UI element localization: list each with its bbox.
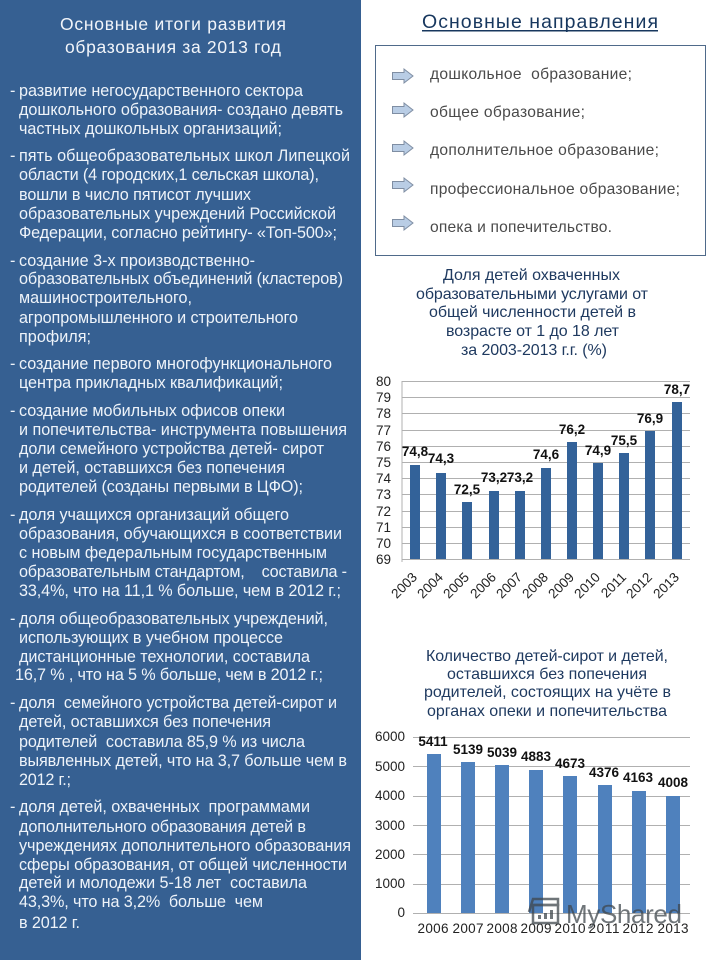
x axis labels: 2011	[588, 921, 620, 936]
x axis labels: 2008	[486, 921, 518, 936]
list item: mobile offices	[10, 402, 347, 496]
list item: federal standard: образования, обучающихся в соответствии	[19, 525, 342, 543]
x axis labels: 2010	[554, 921, 586, 936]
x axis labels	[388, 569, 682, 601]
list item: additional education: сферы образования, от общей численности	[19, 856, 347, 874]
heading: chart 2 title: родителей, состоящих на учёте в	[424, 684, 671, 701]
list item: clusters: образовательных объединений (кластеров)	[19, 270, 343, 288]
data labels: 5139	[453, 742, 483, 757]
list item: additional education: детей и молодежи 5-18 лет составила	[19, 874, 307, 892]
data labels: 78,7	[664, 382, 690, 397]
data labels: 4376	[589, 765, 620, 780]
panel: directions box	[376, 46, 706, 256]
list item: top-500 schools: пять общеобразовательных школ Липецкой	[19, 147, 350, 165]
icon: arrow 4	[392, 178, 413, 192]
list item: federal standard: -	[10, 506, 15, 524]
list item: clusters: агропромышленного и строительного	[19, 309, 298, 327]
list item: top-500 schools: области (4 городских,1 сельская школа),	[19, 166, 319, 184]
list item: mobile offices: и детей, оставшихся без попечения	[19, 459, 285, 477]
x axis labels: 2009	[545, 570, 577, 601]
y axis labels	[376, 374, 391, 567]
list item: top-500 schools: вошли в число пятисот лучших	[19, 186, 251, 204]
list item: family placement: детей, оставшихся без попечения	[19, 713, 271, 731]
list item: clusters: профиля;	[19, 328, 91, 346]
list item: family placement: 2012 г.;	[19, 771, 71, 789]
heading: chart 1 title: за 2003-2013 г.г. (%)	[461, 342, 607, 359]
heading: results of 2013: Основные итоги развития	[60, 14, 286, 34]
list item: mobile offices: и попечительства- инструмента повышения	[19, 421, 347, 439]
list item: distance technologies: 16,7 % , что на 5 % больше, чем в 2012 г.;	[15, 666, 323, 684]
x axis labels: 2007	[452, 921, 484, 936]
heading: chart 2 title	[424, 648, 671, 720]
list item: mobile offices: родителей (созданы первыми в ЦФО);	[19, 478, 303, 496]
y axis labels: 3000	[375, 818, 405, 833]
heading: results of 2013	[60, 14, 286, 57]
data labels: 4883	[521, 749, 552, 764]
text block: directions list: дошкольное образование;	[430, 66, 632, 83]
list item: additional education: 43,3%, что на 3,2% больше чем	[19, 893, 263, 911]
x axis labels: 2009	[520, 921, 552, 936]
list item: family placement: родителей составила 85,9 % из числа	[19, 733, 305, 751]
chart bars	[427, 754, 680, 913]
text block: directions list: общее образование;	[430, 104, 585, 121]
list item: federal standard	[10, 506, 347, 600]
list item: top-500 schools: -	[10, 147, 15, 165]
list item: additional education: учреждениях дополнительного образования	[19, 837, 351, 855]
data labels: 74,6	[533, 447, 560, 462]
y axis labels: 0	[397, 905, 405, 920]
heading: chart 1 title	[416, 267, 649, 359]
list item: private preschool	[10, 82, 343, 138]
x axis labels: 2006	[467, 570, 499, 601]
list item: clusters: машиностроительного,	[19, 289, 192, 307]
list item: additional education: в 2012 г.	[19, 914, 80, 932]
list item: private preschool: частных дошкольных организаций;	[19, 120, 282, 138]
list item: private preschool: -	[10, 82, 15, 100]
x axis labels: 2003	[388, 570, 420, 601]
data labels	[418, 734, 689, 790]
list item: qualification centre: -	[10, 355, 15, 373]
list item: federal standard: образовательным стандартом, составила -	[19, 563, 347, 581]
list item: distance technologies: -	[10, 610, 15, 628]
x axis labels: 2012	[622, 921, 654, 936]
y axis labels: 2000	[375, 847, 405, 862]
list item: qualification centre	[10, 355, 332, 392]
icon: arrow 5	[392, 216, 413, 230]
text block: directions list	[430, 66, 680, 236]
y axis labels: 80	[376, 374, 391, 389]
y axis labels: 1000	[375, 876, 405, 891]
list item: family placement: -	[10, 694, 15, 712]
list item: mobile offices: -	[10, 402, 15, 420]
x axis labels: 2008	[519, 570, 551, 601]
data labels: 76,2	[559, 422, 585, 437]
data labels: 4163	[623, 770, 654, 785]
y axis labels	[375, 729, 405, 920]
list item: top-500 schools: образовательных учреждений Российской	[19, 205, 336, 223]
list item: top-500 schools: Федерации, согласно рейтингу- «Топ-500»;	[19, 224, 337, 242]
list item: family placement	[10, 694, 347, 789]
heading: chart 2 title: оставшихся без попечения	[447, 666, 647, 683]
x axis labels	[418, 921, 688, 936]
x axis labels: 2005	[440, 570, 472, 601]
y axis labels: 70	[376, 536, 391, 551]
heading: chart 1 title: образовательными услугами от	[416, 286, 649, 303]
list item: family placement: доля семейного устройства детей-сирот и	[19, 694, 337, 712]
heading: chart 2 title: Количество детей-сирот и детей,	[426, 648, 668, 665]
icon: arrow 2	[392, 103, 413, 117]
text block: directions list: профессиональное образование;	[430, 181, 680, 198]
list item: federal standard: доля учащихся организаций общего	[19, 506, 289, 524]
list item: distance technologies	[10, 610, 328, 684]
data labels: 72,5	[454, 482, 481, 497]
data labels: 5039	[487, 745, 517, 760]
y axis labels: 74	[376, 471, 391, 486]
x axis labels: 2006	[418, 921, 448, 936]
x axis labels: 2012	[623, 570, 655, 601]
icon: watermark logo	[529, 899, 558, 923]
list item: additional education: дополнительного образования детей в	[19, 818, 306, 836]
y axis labels: 69	[376, 552, 391, 567]
bar chart: orphans count	[375, 729, 690, 936]
data labels	[402, 382, 690, 497]
y axis labels: 4000	[375, 788, 405, 803]
data labels: 74,3	[428, 451, 455, 466]
heading: chart 1 title: общей численности детей в	[429, 304, 636, 321]
icon: arrow 1	[392, 69, 413, 83]
list item: mobile offices: доли семейного устройства детей- сирот	[19, 440, 325, 458]
heading: chart 1 title: возрасте от 1 до 18 лет	[446, 323, 620, 340]
x axis labels: 2010	[571, 570, 603, 601]
chart bars	[410, 402, 682, 559]
y axis labels: 75	[376, 455, 391, 470]
list item: distance technologies: доля общеобразовательных учреждений,	[19, 610, 328, 628]
heading: chart 1 title: Доля детей охваченных	[443, 267, 620, 284]
x axis labels: 2011	[598, 570, 629, 601]
list item: additional education: -	[10, 798, 15, 816]
data labels: 74,9	[585, 443, 611, 458]
data labels: 74,8	[402, 444, 429, 459]
y axis labels: 76	[376, 439, 391, 454]
y axis labels: 5000	[375, 759, 405, 774]
list item: private preschool: дошкольного образования- создано девять	[19, 101, 343, 119]
list item: private preschool: развитие негосударственного сектора	[19, 82, 303, 100]
list item: mobile offices: создание мобильных офисов опеки	[19, 402, 285, 420]
data labels: 4673	[555, 756, 586, 771]
list item: clusters: создание 3-х производственно-	[19, 252, 255, 270]
x axis labels: 2013	[658, 921, 688, 936]
panel: left results background	[0, 0, 361, 960]
heading: chart 2 title: органах опеки и попечительства	[427, 703, 667, 720]
data labels: 4008	[658, 775, 689, 790]
y axis labels: 77	[376, 423, 391, 438]
text block: directions list: опека и попечительство.	[430, 219, 612, 236]
y axis labels: 73	[376, 487, 391, 502]
data labels: 5411	[418, 734, 448, 749]
list item: additional education: доля детей, охваченных программами	[19, 798, 310, 816]
list item: distance technologies: использующих в учебном процессе	[19, 629, 283, 647]
y axis labels: 6000	[375, 729, 405, 744]
data labels: 73,2	[481, 470, 507, 485]
y axis labels: 71	[376, 520, 391, 535]
list item: federal standard: с новым федеральным государственным	[19, 544, 327, 562]
list item: federal standard: 33,4%, что на 11,1 % больше, чем в 2012 г.;	[19, 582, 341, 600]
data labels: 76,9	[637, 411, 663, 426]
list item: family placement: выявленных детей, что на 3,7 больше чем в	[19, 752, 347, 770]
heading: main directions: Основные направления	[422, 11, 658, 33]
text block: directions list: дополнительное образование;	[430, 142, 659, 159]
watermark text: MyShared	[566, 899, 682, 929]
y axis labels: 78	[376, 406, 391, 421]
x axis labels: 2013	[650, 570, 682, 601]
bar chart: share of children covered	[376, 374, 690, 601]
list item: additional education	[10, 798, 351, 932]
list item: distance technologies: дистанционные технологии, составила	[19, 648, 310, 666]
data labels: 75,5	[611, 433, 638, 448]
data labels: 73,2	[507, 470, 533, 485]
list item: qualification centre: создание первого многофункционального	[19, 355, 332, 373]
icon: arrow 3	[392, 141, 413, 155]
y axis labels: 79	[376, 390, 391, 405]
list item: qualification centre: центра прикладных квалификаций;	[19, 374, 283, 392]
list item: top-500 schools	[10, 147, 350, 242]
x axis labels: 2007	[493, 570, 525, 601]
list item: clusters	[10, 252, 343, 346]
heading: results of 2013: образования за 2013 год	[65, 37, 281, 57]
y axis labels: 72	[376, 504, 391, 519]
text block: results list	[10, 82, 351, 932]
x axis labels: 2004	[414, 569, 446, 601]
list item: clusters: -	[10, 252, 15, 270]
